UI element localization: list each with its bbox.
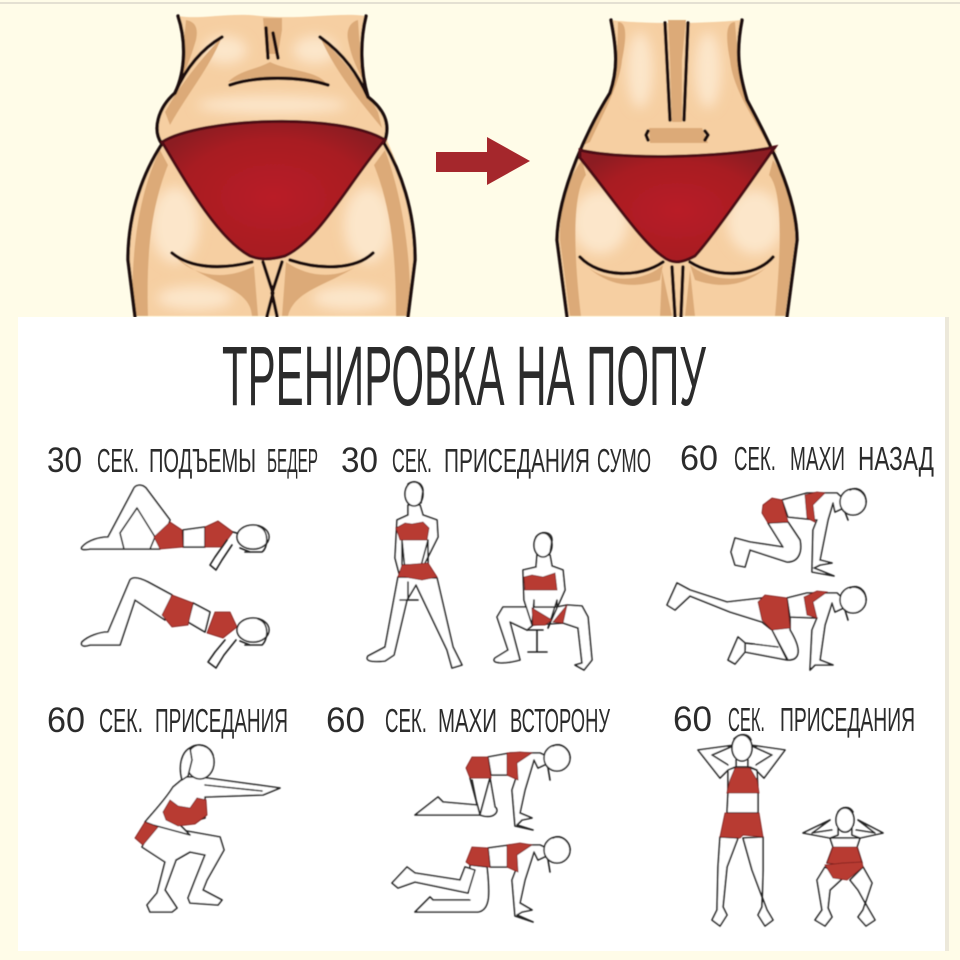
label: hip raises: 30 [47,441,82,480]
illustration: body before [128,15,415,316]
label: back kicks [680,439,934,478]
exercise: back kicks [667,489,866,670]
label: side kicks: МАХИ [438,702,497,739]
label: sumo squats: ПРИСЕДАНИЯ [444,442,590,479]
arrow [436,137,530,185]
label: back kicks: СЕК. [734,440,776,477]
illustration: body after [557,20,797,316]
label: sumo squats [341,441,651,480]
panel: workout [18,317,949,951]
label: side kicks [326,701,611,740]
label: back kicks: 60 [680,439,718,478]
exercise: side kicks [392,745,570,922]
label: side kicks: ВСТОРОНУ [510,702,611,739]
label: side kicks: 60 [326,701,365,740]
label: squats: ПРИСЕДАНИЯ [155,702,288,739]
label: squats: 60 [47,701,85,740]
label: squats arms up: СЕК. [728,701,765,738]
label: squats [47,701,288,740]
label: sumo squats: СУМО [597,442,651,479]
label: hip raises: СЕК. [97,442,139,479]
label: sumo squats: 30 [341,441,378,480]
label: squats arms up: 60 [673,700,712,739]
exercise: hip raises [81,485,269,668]
label: squats arms up [673,700,915,739]
exercise: squats [135,745,280,912]
label: hip raises [47,441,318,480]
red briefs after [580,147,775,262]
label: sumo squats: СЕК. [392,442,432,479]
label: squats: СЕК. [99,702,143,739]
label: side kicks: СЕК. [385,702,427,739]
exercise: sumo squats [367,482,592,670]
label: back kicks: МАХИ [790,440,845,477]
label: hip raises: ПОДЪЕМЫ [149,442,256,479]
panel: workout: БЕДЕР [267,442,318,479]
red briefs before [162,121,385,259]
exercise: squats arms up [698,735,883,926]
